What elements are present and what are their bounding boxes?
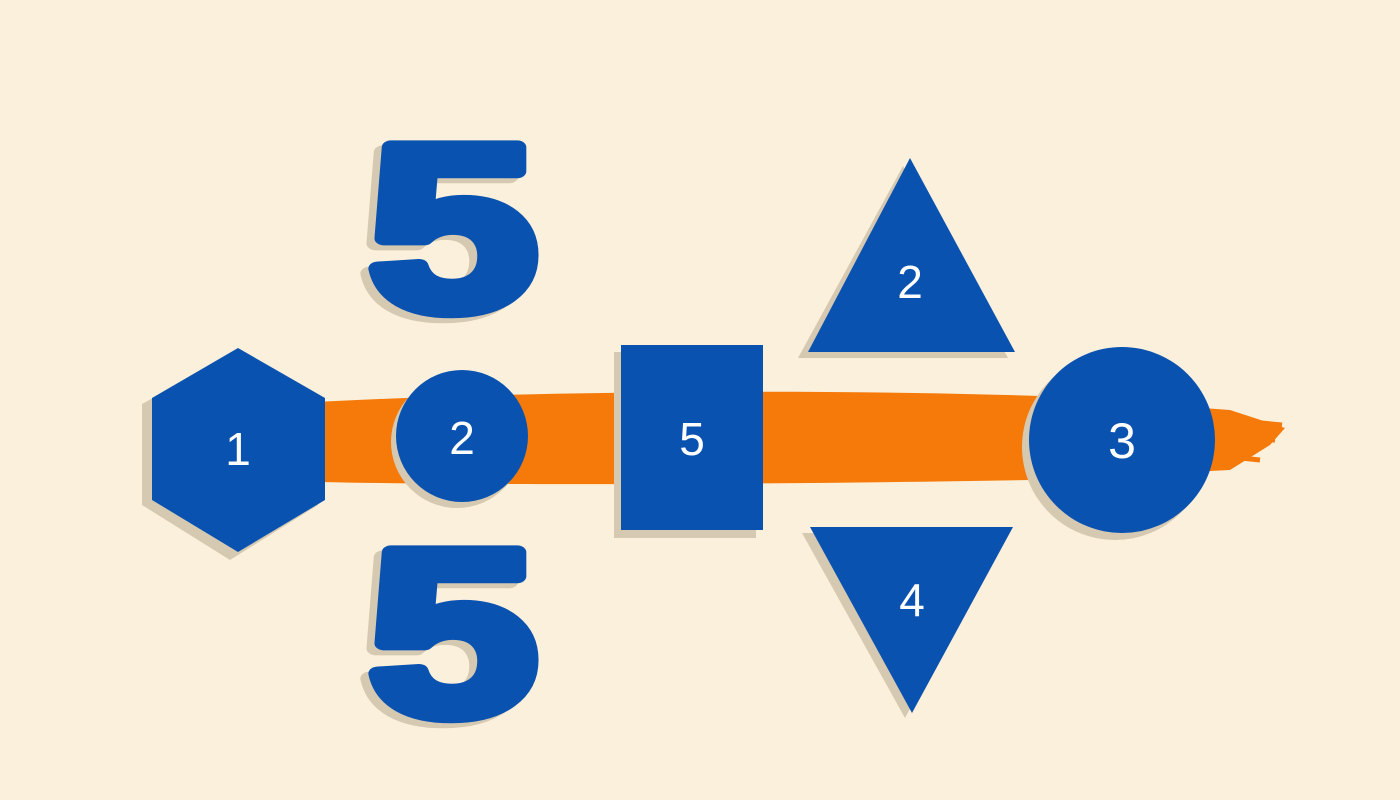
triangle up step 2: 2 [897, 256, 923, 308]
big numeral 5 bottom: 5 [368, 501, 538, 764]
circle step 3 [1022, 347, 1215, 540]
circle step 2: 2 [449, 412, 475, 464]
square step 5: 5 [679, 413, 705, 465]
big numeral 5 top: 5 [368, 96, 538, 359]
big numeral 5 bottom: 5 [360, 506, 530, 769]
big numeral 5 top: 5 [360, 101, 530, 364]
square step 5 [614, 345, 763, 538]
triangle up step 2 [798, 158, 1015, 358]
circle step 2 [391, 370, 528, 508]
orange brush stroke connector [318, 392, 1285, 484]
triangle down step 4 [802, 527, 1013, 718]
circle step 3: 3 [1108, 413, 1136, 469]
triangle down step 4: 4 [899, 574, 925, 626]
hexagon step 1 [142, 348, 325, 560]
hexagon step 1: 1 [225, 423, 251, 475]
